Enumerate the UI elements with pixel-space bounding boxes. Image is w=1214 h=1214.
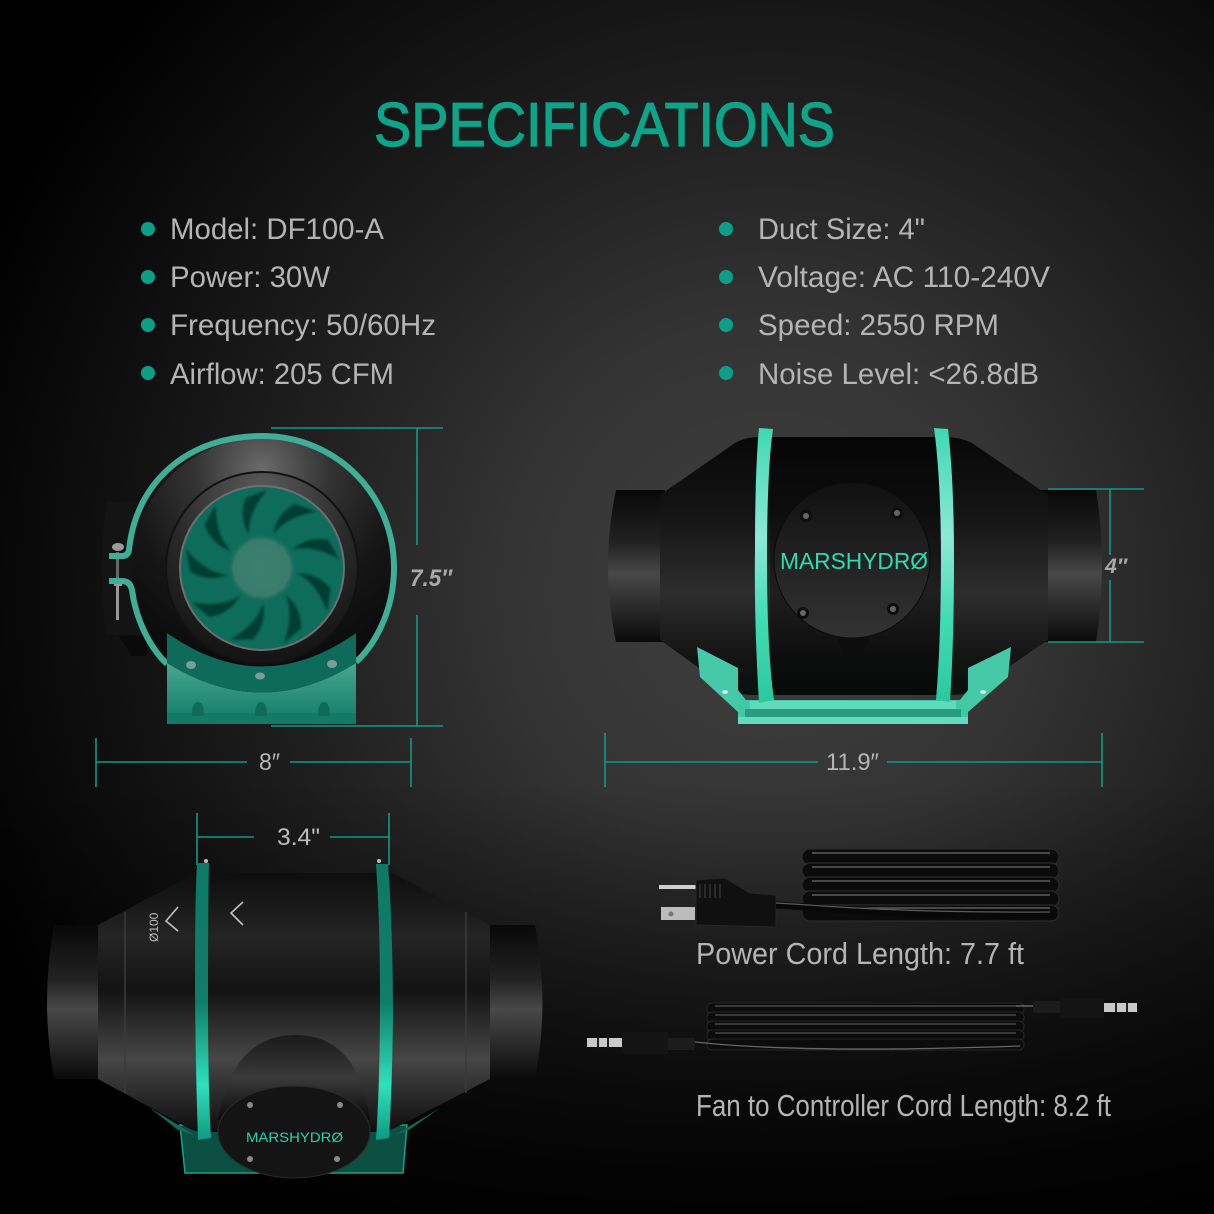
spec item: duct size: Duct Size: 4": [758, 213, 925, 246]
dimension: height 7.5 inch: 7.5″: [410, 565, 453, 592]
fan blades: [182, 490, 340, 648]
spec item: frequency: Frequency: 50/60Hz: [170, 309, 436, 342]
dimension: width 8 inch: 8″: [259, 749, 280, 776]
panel: power cord: [659, 849, 1059, 927]
dimension: duct 4 inch: 4″: [1104, 555, 1128, 578]
teal clamp band: [109, 436, 394, 664]
panel: left specification list: [141, 213, 436, 391]
spec item: power: Power: 30W: [170, 261, 331, 294]
bracket base: [738, 690, 968, 724]
left duct: [47, 925, 105, 1079]
mounting bracket: [167, 633, 356, 724]
fan opening: [180, 486, 344, 650]
coil highlights: [715, 1006, 1016, 1033]
dimension: band spacing 3.4 inch: 3.4": [277, 824, 320, 851]
plug ribs: [700, 884, 720, 898]
spec item: airflow: Airflow: 205 CFM: [170, 358, 394, 391]
controller cord caption: Fan to Controller Cord Length: 8.2 ft: [696, 1088, 1111, 1123]
screws: [247, 1102, 343, 1162]
left duct: [608, 490, 665, 642]
airflow chevrons: [166, 902, 243, 931]
power cord caption: Power Cord Length: 7.7 ft: [696, 936, 1024, 971]
fan hub: [229, 535, 295, 601]
left jack: [587, 1032, 1020, 1054]
coiled cord: [707, 1003, 1024, 1050]
title: SPECIFICATIONS: [374, 91, 835, 160]
panel: front view of fan: [102, 436, 394, 724]
logo: MARSHYDRØ: [780, 548, 928, 574]
control box behind fan: [102, 502, 150, 635]
dimension: duct 4 inch: [1048, 489, 1144, 642]
panel: right specification list: [719, 213, 1050, 391]
dimension: length 11.9 inch: [605, 733, 1102, 787]
right jack: [1016, 998, 1137, 1018]
clamp bolt: [112, 543, 124, 620]
dimension: height 7.5 inch: [271, 428, 453, 726]
band bolts: [204, 859, 381, 863]
bracket wing left: [697, 647, 738, 712]
control disc: [774, 482, 930, 638]
inner ring: [166, 472, 358, 664]
cord lead: [776, 905, 1055, 915]
plug pins: [659, 885, 697, 920]
green band right: [934, 428, 954, 702]
cable gland: [118, 635, 150, 656]
right duct: [1040, 490, 1102, 642]
dimension: width 8 inch: [96, 738, 411, 787]
dimension: band spacing 3.4 inch: [197, 813, 389, 865]
fan housing: [132, 438, 392, 698]
dimension: length 11.9 inch: 11.9″: [826, 749, 879, 776]
body seams: [125, 912, 466, 1093]
cord lead highlight: [776, 903, 1050, 912]
spec item: speed: Speed: 2550 RPM: [758, 309, 999, 342]
panel: fan to controller cord: [587, 998, 1137, 1054]
motor housing: [218, 1035, 370, 1120]
screws: [798, 508, 902, 618]
motor cap: [218, 1086, 370, 1178]
green band left: [755, 428, 774, 703]
plug body: [696, 878, 776, 927]
coil highlights: [812, 853, 1050, 908]
coiled cord: [802, 849, 1059, 921]
fan main body: [660, 437, 1048, 695]
spec item: noise level: Noise Level: <26.8dB: [758, 358, 1039, 391]
band right: [376, 864, 393, 1140]
centre shell: [770, 437, 940, 695]
spec item: voltage: Voltage: AC 110-240V: [758, 261, 1050, 294]
bracket wing right: [968, 647, 1011, 712]
main body: [98, 873, 490, 1132]
panel: side view of fan: [608, 428, 1102, 724]
bracket: [150, 1108, 440, 1173]
spec item: model: Model: DF100-A: [170, 213, 384, 246]
logo: MARSHYDRØ: [246, 1129, 343, 1145]
band left: [195, 863, 211, 1140]
cable gland: [836, 638, 870, 661]
right duct: [485, 925, 542, 1079]
duct size marking: Ø100: [147, 912, 161, 942]
panel: top view of fan: [47, 859, 542, 1178]
